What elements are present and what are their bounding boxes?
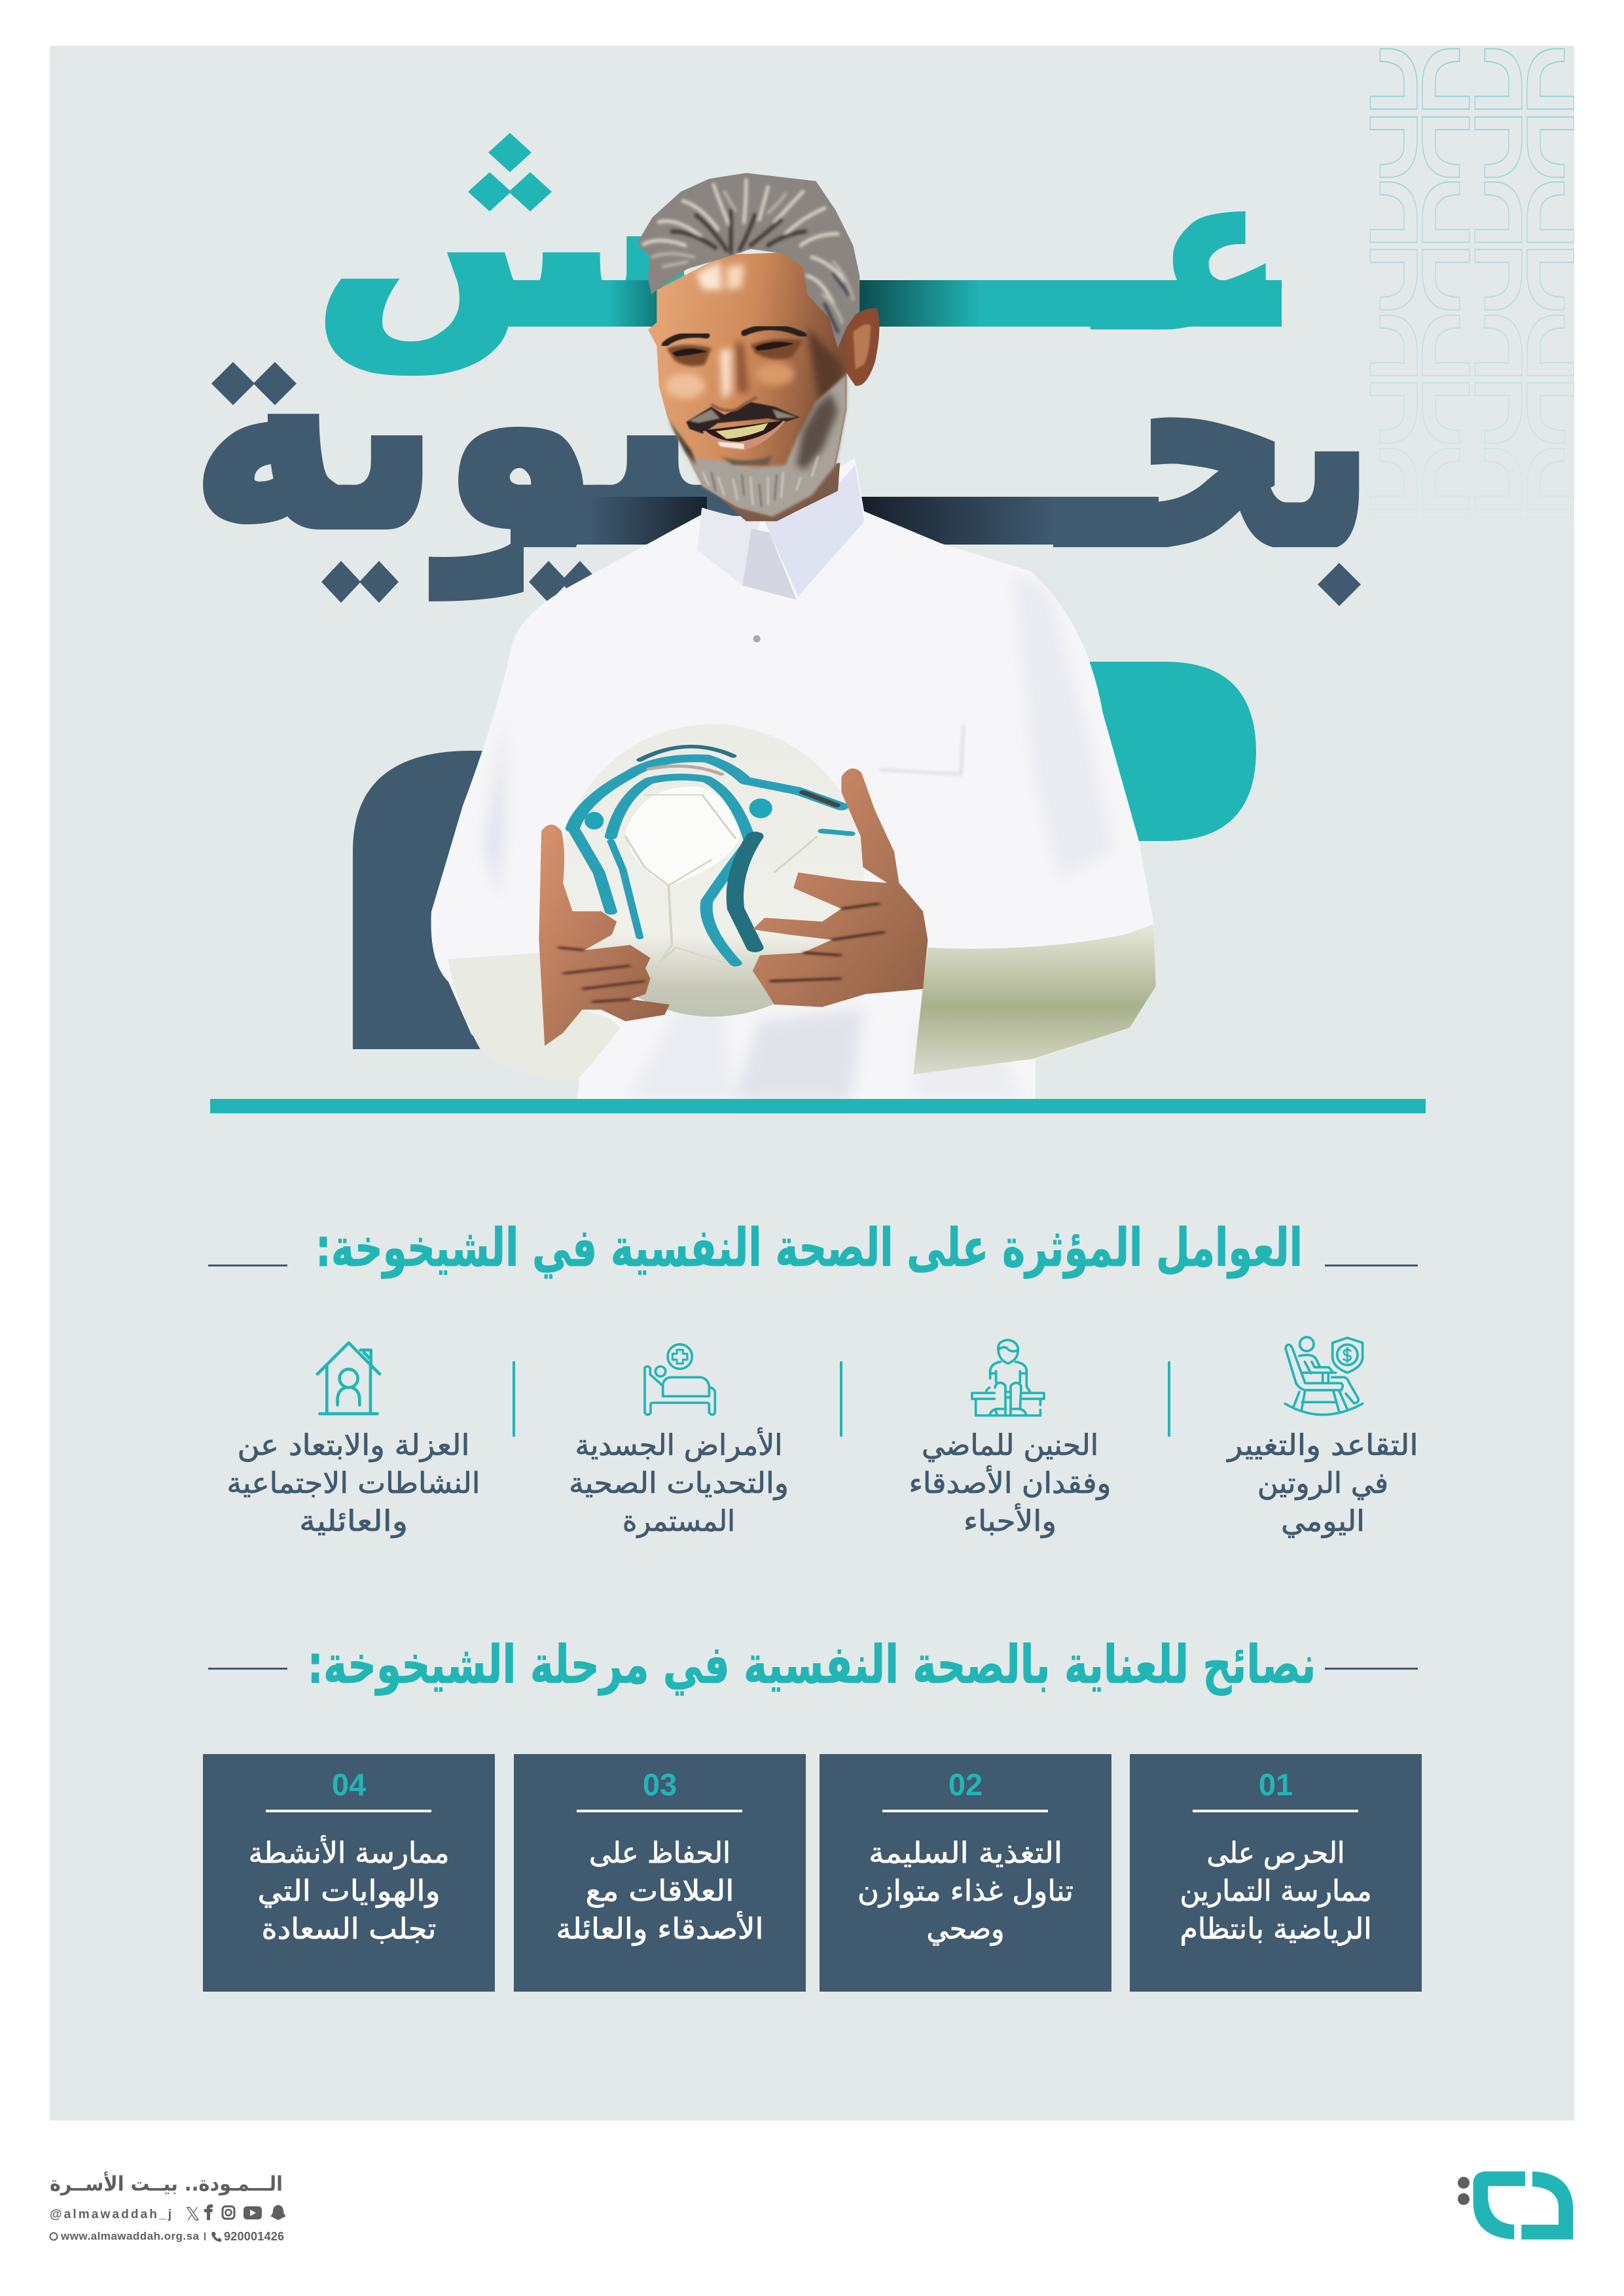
social icons	[185, 2203, 286, 2225]
text: nostalgia: وفقدان الأصدقاء	[909, 1465, 1111, 1500]
title: second word: ـيوية	[190, 253, 797, 600]
factor 2: nostalgia	[909, 1340, 1111, 1538]
icon: rocking chair and shield	[1285, 1337, 1363, 1414]
hair	[637, 173, 859, 348]
title: first word: عـ	[1092, 126, 1282, 378]
text: nostalgia	[909, 1429, 1111, 1538]
text: retirement	[1226, 1429, 1418, 1538]
football	[562, 724, 864, 1016]
footer contact block	[50, 2171, 286, 2243]
footer website: 920001426	[224, 2230, 284, 2243]
title dots	[468, 133, 552, 211]
icon: house with person	[317, 1343, 380, 1414]
right hand	[753, 768, 928, 1007]
footer website: www.almawaddah.org.sa	[60, 2230, 200, 2242]
ear	[842, 308, 879, 386]
face	[648, 253, 846, 516]
left cuff	[448, 953, 621, 1081]
card 02	[820, 1754, 1111, 1992]
text: illness: والتحديات الصحية	[569, 1467, 789, 1500]
card 04: والهوايات التي	[258, 1874, 440, 1908]
moustache	[686, 402, 800, 433]
text: illness	[569, 1427, 789, 1538]
text: retirement: التقاعد والتغيير	[1226, 1429, 1418, 1462]
card 04: تجلب السعادة	[262, 1912, 436, 1946]
title: second word	[203, 362, 1361, 606]
card 04: ممارسة الأنشطة	[249, 1835, 449, 1870]
card 03: الحفاظ على	[589, 1837, 731, 1870]
separator 1	[1168, 1361, 1170, 1437]
lower body, ball and hands	[448, 724, 1156, 1081]
smile	[702, 421, 785, 450]
title: first word: ـش	[311, 117, 816, 374]
card 02: التغذية السليمة	[869, 1837, 1062, 1870]
thobe body	[431, 458, 1156, 1100]
card 03: 03	[643, 1767, 677, 1802]
icon: hospital bed	[645, 1344, 715, 1415]
card 03	[514, 1754, 806, 1992]
collar	[697, 465, 864, 642]
section heading: factors: العوامل المؤثرة على الصحة النفسية في الشيخوخة:	[316, 1217, 1303, 1279]
text: isolation: العزلة والابتعاد عن	[237, 1429, 470, 1462]
title dots	[211, 362, 1361, 606]
social icons: 𝕏	[185, 2203, 200, 2225]
factor 1: retirement	[1226, 1337, 1418, 1538]
title: second word: بحـ	[1055, 262, 1375, 617]
card 01: الحرص على	[1207, 1837, 1344, 1870]
person holding ball	[431, 173, 1156, 1100]
card 01: 01	[1259, 1767, 1293, 1802]
title: first word	[311, 117, 1282, 378]
text: isolation: والعائلية	[299, 1505, 408, 1538]
chest pocket	[880, 725, 964, 774]
face highlights	[666, 262, 842, 400]
text: nostalgia: والأحباء	[964, 1503, 1056, 1538]
separator 3	[513, 1361, 515, 1437]
card 02: 02	[948, 1767, 983, 1802]
footer handle: @almawaddah_j	[50, 2208, 171, 2221]
footer website	[50, 2230, 284, 2243]
footer slogan: الـــمـودة.. بيــت الأســرة	[50, 2171, 283, 2196]
shape: dark arch block	[353, 751, 524, 1049]
factor 4: isolation	[226, 1343, 480, 1538]
card 03: العلاقات مع	[585, 1874, 734, 1908]
shape: teal rounded block	[1090, 662, 1256, 841]
section heading: tips: نصائح للعناية بالصحة النفسية في مرحلة الشيخوخة:	[308, 1634, 1316, 1696]
teal divider bar	[210, 1099, 1426, 1113]
card 02: وصحي	[927, 1912, 1004, 1946]
text: illness: المستمرة	[623, 1505, 735, 1538]
card 02: تناول غذاء متوازن	[857, 1874, 1074, 1908]
text: isolation	[226, 1429, 480, 1538]
nose base	[712, 397, 757, 410]
card 01: ممارسة التمارين	[1180, 1874, 1372, 1908]
text: retirement: في الروتين	[1257, 1467, 1388, 1500]
beard	[668, 374, 846, 516]
card 03: الأصدقاء والعائلة	[556, 1910, 763, 1946]
logo	[1458, 2172, 1573, 2240]
icon: person on bench	[972, 1340, 1044, 1416]
decorative pattern top right	[1368, 47, 1574, 577]
separator 2	[840, 1361, 842, 1437]
text: illness: الأمراض الجسدية	[575, 1427, 783, 1462]
eyes and brows	[664, 327, 804, 366]
card 01: الرياضية بانتظام	[1180, 1912, 1372, 1946]
right cuff	[913, 924, 1156, 1074]
left hand	[539, 825, 670, 1046]
factor 3: illness	[569, 1344, 789, 1538]
head	[637, 173, 879, 521]
text: nostalgia: الحنين للماضي	[922, 1429, 1098, 1462]
text: isolation: النشاطات الاجتماعية	[226, 1467, 480, 1500]
neck shadow	[707, 463, 840, 521]
card 04: 04	[332, 1767, 366, 1802]
thobe folds	[484, 576, 1113, 1100]
text: retirement: اليومي	[1281, 1505, 1365, 1538]
card 04	[203, 1754, 495, 1992]
card 01	[1130, 1754, 1422, 1992]
